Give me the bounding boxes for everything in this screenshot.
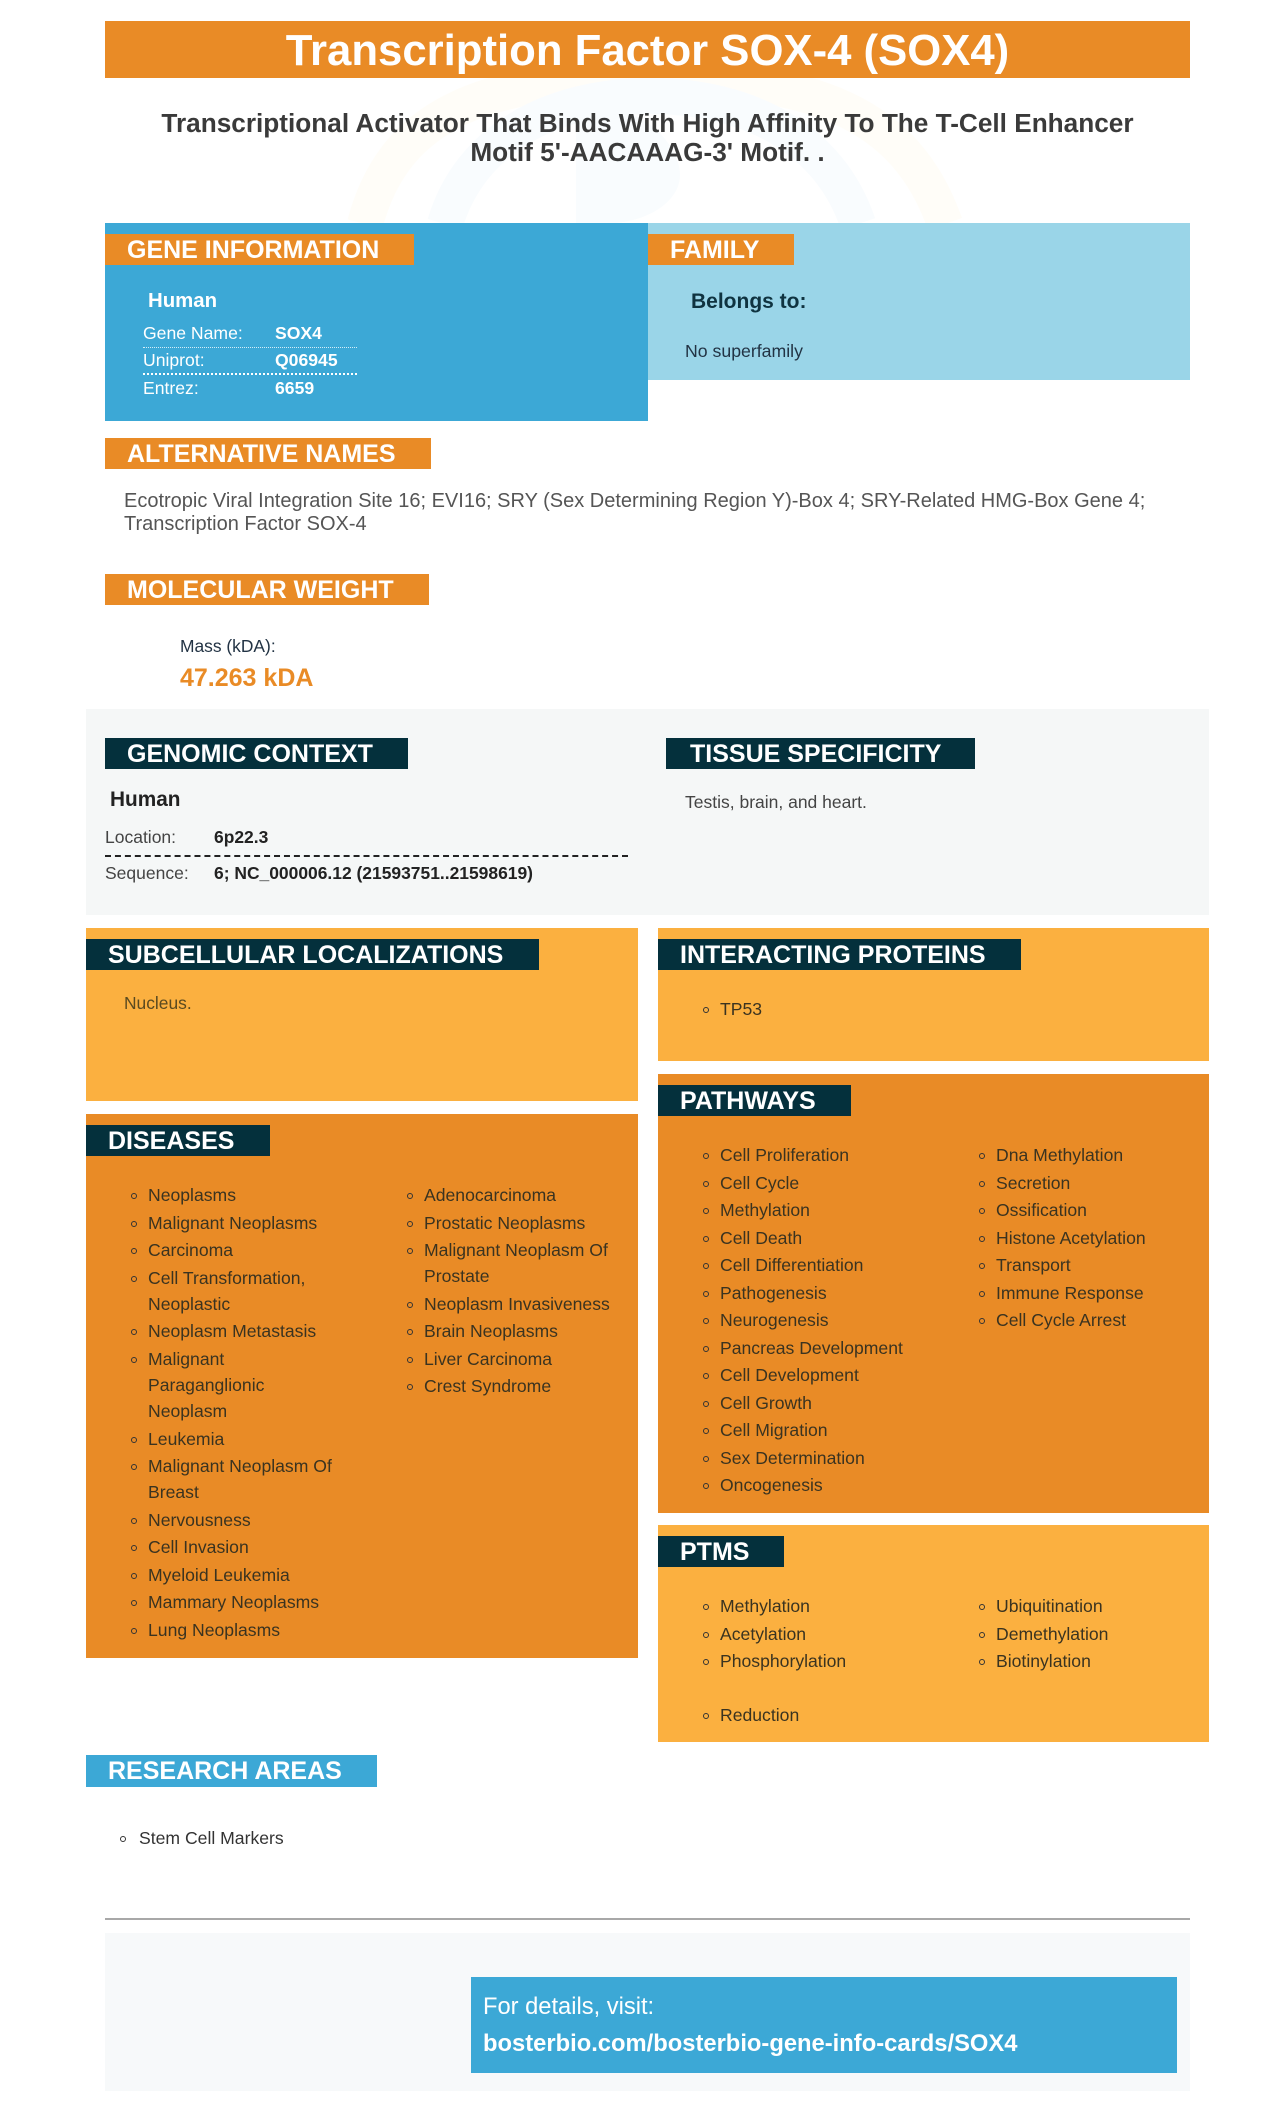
list right: Secretion: [996, 1172, 1070, 1192]
heading: INTERACTING PROTEINS: [680, 941, 986, 969]
list left: [703, 1596, 846, 1725]
list right: Demethylation: [996, 1624, 1108, 1644]
alternative names text: Ecotropic Viral Integration Site 16; EVI16; SRY (Sex Determining Region Y)-Box 4; SRY-Related HMG-Box Gene 4; Transcription Factor SOX-4: [124, 490, 1145, 534]
list left: Cell Transformation, Neoplastic: [148, 1268, 305, 1314]
callout: details link: bosterbio.com/bosterbio-gene-info-cards/SOX4: [483, 2030, 1017, 2057]
panel: subcellular localizations: [86, 928, 638, 1101]
list right: Dna Methylation: [996, 1145, 1123, 1165]
list left: Cell Death: [720, 1228, 802, 1248]
gene facts: Entrez:: [143, 378, 199, 398]
list left: [131, 1185, 332, 1640]
list: TP53: [720, 999, 762, 1019]
list left: Oncogenesis: [720, 1475, 823, 1495]
subtitle: Transcriptional Activator That Binds With High Affinity To The T-Cell Enhancer: [161, 108, 1134, 138]
list left: Acetylation: [720, 1624, 806, 1644]
heading: DISEASES: [108, 1127, 234, 1155]
family value: No superfamily: [685, 341, 803, 361]
panel: diseases: [86, 1114, 638, 1658]
heading: PATHWAYS: [680, 1087, 816, 1115]
heading: family: FAMILY: [670, 236, 759, 264]
list right: Liver Carcinoma: [424, 1349, 552, 1369]
divider: [105, 1918, 1190, 1920]
list right: Adenocarcinoma: [424, 1185, 556, 1205]
subtitle: [161, 108, 1134, 167]
list right: Ossification: [996, 1200, 1087, 1220]
gene facts: 6659: [275, 378, 314, 398]
callout: details link: For details, visit:: [483, 1994, 654, 2020]
list right: [407, 1185, 610, 1396]
mass value: 47.263 kDA: [180, 664, 313, 692]
location: Location:: [105, 827, 176, 847]
list right: Ubiquitination: [996, 1596, 1103, 1616]
list left: Leukemia: [148, 1429, 224, 1449]
list left: Cell Development: [720, 1365, 859, 1385]
list left: Cell Proliferation: [720, 1145, 849, 1165]
heading: PTMS: [680, 1538, 749, 1566]
list left: Malignant Neoplasm Of Breast: [148, 1456, 332, 1502]
title: [105, 21, 1190, 78]
list left: Reduction: [720, 1705, 799, 1725]
heading: gene information: GENE INFORMATION: [127, 236, 379, 264]
gene facts: Q06945: [275, 350, 338, 370]
list left: Cell Migration: [720, 1420, 828, 1440]
heading: tissue specificity: TISSUE SPECIFICITY: [690, 740, 941, 768]
list right: Transport: [996, 1255, 1071, 1275]
list right: Prostatic Neoplasms: [424, 1212, 585, 1232]
list right: Biotinylation: [996, 1651, 1091, 1671]
list left: Neoplasm Metastasis: [148, 1321, 316, 1341]
heading: family: [648, 234, 794, 265]
heading: [658, 1536, 784, 1567]
list left: [703, 1145, 903, 1495]
heading: alternative names: ALTERNATIVE NAMES: [127, 440, 396, 468]
sequence: Sequence:: [105, 863, 189, 883]
list left: Myeloid Leukemia: [148, 1565, 290, 1585]
gene facts: Uniprot:: [143, 350, 205, 370]
list left: Cell Growth: [720, 1392, 812, 1412]
list left: Lung Neoplasms: [148, 1620, 280, 1640]
list right: Crest Syndrome: [424, 1376, 551, 1396]
list right: Malignant Neoplasm Of Prostate: [424, 1240, 608, 1286]
list right: [979, 1596, 1108, 1671]
title: Transcription Factor SOX-4 (SOX4): [286, 26, 1009, 75]
panel: pathways: [658, 1074, 1209, 1513]
list left: Malignant Neoplasms: [148, 1212, 317, 1232]
panel: genomic context and tissue specificity: [86, 709, 1209, 915]
background watermark: [0, 0, 1288, 230]
panel: genomic context and tissue specificity: 6p22.3: [214, 827, 268, 847]
list left: Neurogenesis: [720, 1310, 829, 1330]
text: Nucleus.: [124, 993, 192, 1013]
heading: research areas: RESEARCH AREAS: [108, 1757, 342, 1785]
list left: Methylation: [720, 1200, 810, 1220]
list right: Neoplasm Invasiveness: [424, 1294, 610, 1314]
gene facts: SOX4: [275, 323, 322, 343]
list left: Malignant Paraganglionic Neoplasm: [148, 1349, 264, 1421]
list left: Phosphorylation: [720, 1651, 846, 1671]
species: Human: [148, 290, 217, 312]
panel: genomic context and tissue specificity: 6; NC_000006.12 (21593751..21598619): [214, 863, 533, 883]
list left: Cell Invasion: [148, 1537, 249, 1557]
list left: Cell Cycle: [720, 1172, 799, 1192]
belongs to: Belongs to:: [691, 290, 806, 313]
list right: Histone Acetylation: [996, 1228, 1146, 1248]
callout: details link: [471, 1977, 1177, 2073]
list left: Pathogenesis: [720, 1282, 827, 1302]
list left: Nervousness: [148, 1510, 251, 1530]
heading: [658, 1085, 851, 1116]
subtitle: Motif 5'-AACAAAG-3' Motif. .: [470, 137, 825, 167]
species: Human: [110, 788, 180, 811]
gene facts: [143, 323, 357, 398]
mass label: Mass (kDA):: [180, 636, 276, 656]
list left: Sex Determination: [720, 1448, 865, 1468]
heading: [86, 1125, 270, 1156]
heading: genomic context: GENOMIC CONTEXT: [127, 740, 373, 768]
list left: Carcinoma: [148, 1240, 233, 1260]
research areas list: Stem Cell Markers: [139, 1828, 284, 1848]
list right: Immune Response: [996, 1282, 1144, 1302]
gene facts: Gene Name:: [143, 323, 243, 343]
panel: gene information: [105, 223, 648, 421]
list right: Brain Neoplasms: [424, 1321, 558, 1341]
list right: Cell Cycle Arrest: [996, 1310, 1126, 1330]
panel: ptms: [658, 1525, 1209, 1742]
heading: SUBCELLULAR LOCALIZATIONS: [108, 941, 503, 969]
heading: molecular weight: MOLECULAR WEIGHT: [127, 576, 394, 604]
panel: family: [648, 223, 1190, 380]
list right: [979, 1145, 1146, 1330]
panel: interacting proteins: [658, 928, 1209, 1061]
list left: Neoplasms: [148, 1185, 236, 1205]
list left: Pancreas Development: [720, 1338, 903, 1358]
list left: Mammary Neoplasms: [148, 1592, 319, 1612]
list left: Cell Differentiation: [720, 1255, 863, 1275]
tissue text: Testis, brain, and heart.: [685, 792, 867, 812]
footer panel: [105, 1933, 1190, 2091]
list left: Methylation: [720, 1596, 810, 1616]
